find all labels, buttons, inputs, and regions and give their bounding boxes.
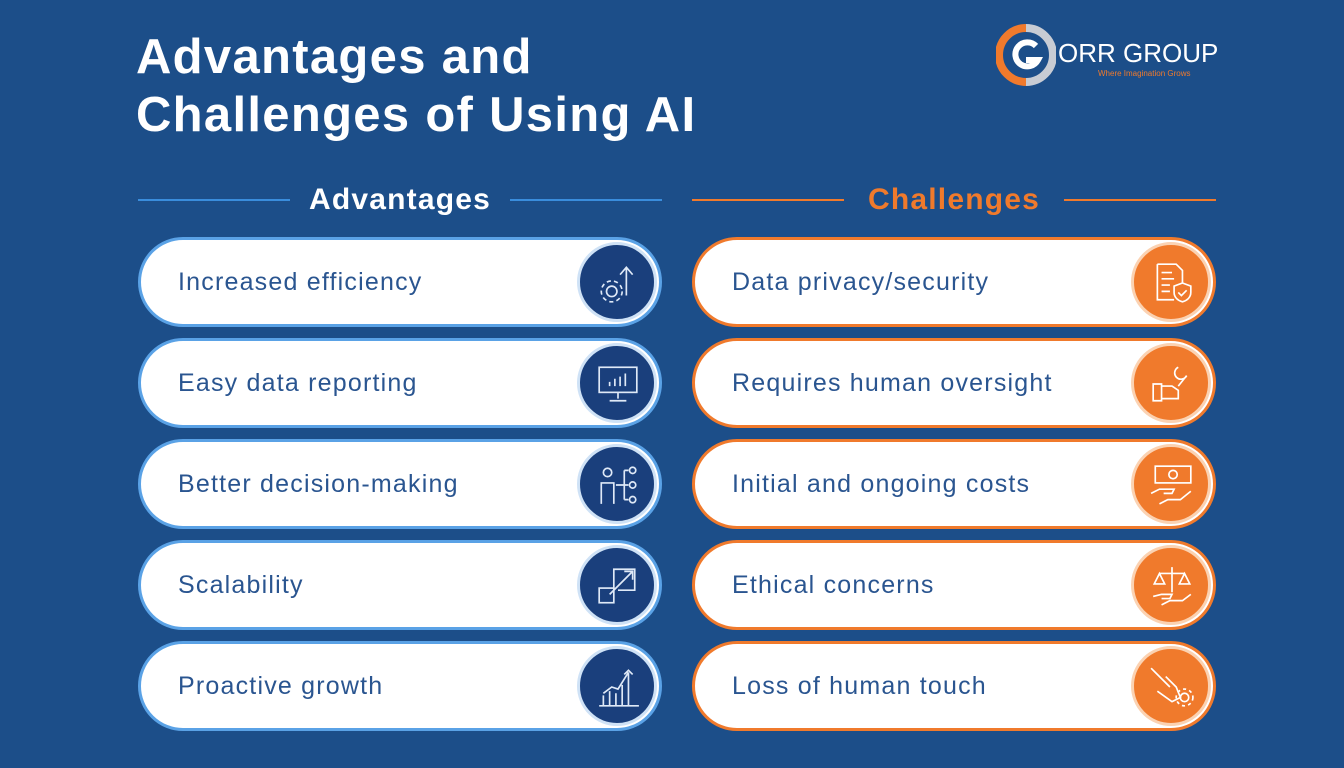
item: increased efficiency: Increased efficiency — [178, 268, 422, 296]
title: Challenges of Using AI — [136, 88, 696, 142]
item: ethical concerns — [692, 540, 1216, 630]
title: Advantages and — [136, 30, 533, 84]
item: easy data reporting: Easy data reporting — [178, 369, 418, 397]
item: better decision-making — [138, 439, 662, 529]
panel: advantages list — [138, 237, 662, 731]
item: scalability: Scalability — [178, 571, 304, 599]
item: costs: Initial and ongoing costs — [732, 470, 1030, 498]
item: scalability — [138, 540, 662, 630]
item: ethical concerns: Ethical concerns — [732, 571, 935, 599]
item: increased efficiency — [138, 237, 662, 327]
item: data privacy — [692, 237, 1216, 327]
item: data privacy: Data privacy/security — [732, 268, 989, 296]
heading: advantages: Advantages — [309, 183, 491, 216]
item: loss of human touch: Loss of human touch — [732, 672, 987, 700]
item: human oversight: Requires human oversight — [732, 369, 1053, 397]
item: better decision-making: Better decision-making — [178, 470, 459, 498]
item: proactive growth: Proactive growth — [178, 672, 383, 700]
logo: Where Imagination Grows — [1098, 69, 1190, 78]
item: human oversight — [692, 338, 1216, 428]
title — [136, 30, 696, 142]
item: easy data reporting — [138, 338, 662, 428]
heading: challenges: Challenges — [868, 183, 1040, 216]
panel: challenges list — [692, 237, 1216, 731]
item: proactive growth — [138, 641, 662, 731]
logo: ORR GROUP — [1058, 38, 1218, 68]
item: loss of human touch — [692, 641, 1216, 731]
logo — [996, 24, 1218, 86]
item: costs — [692, 439, 1216, 529]
